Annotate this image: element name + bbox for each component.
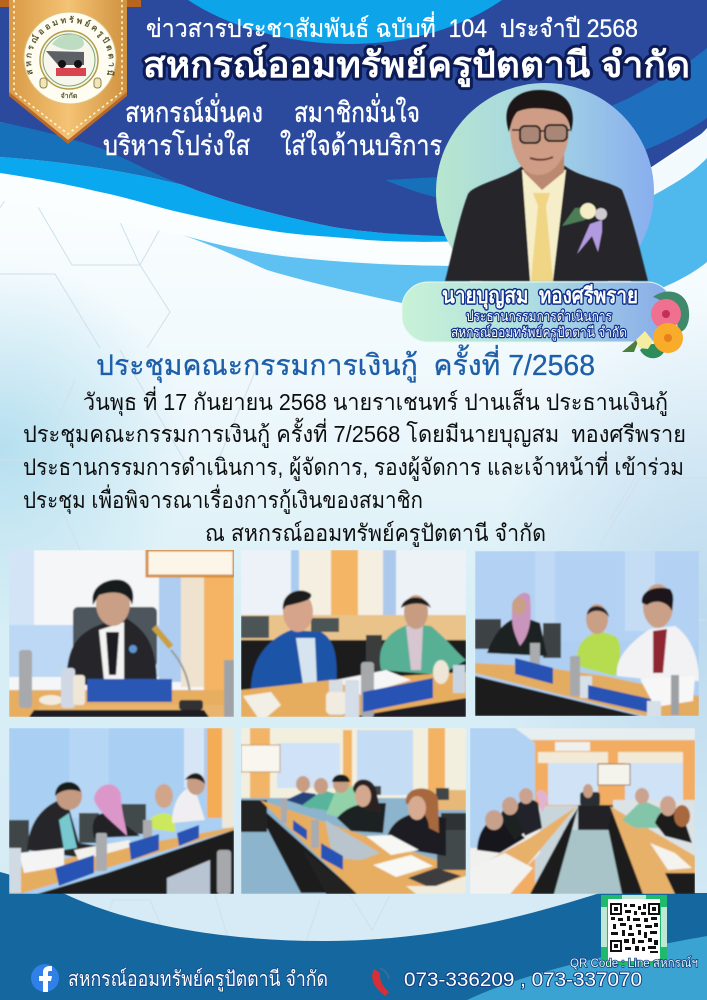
seal ring name [31,23,109,74]
ribbon folds [0,0,141,7]
photo 3: three committee members [475,551,699,716]
white ribbon base [0,170,470,268]
logo ribbon badge [0,0,141,144]
right blue swoosh [606,48,707,150]
stitched border [14,0,122,134]
footer contact bar [31,964,642,996]
code [611,904,659,953]
shirt [522,170,566,281]
photo 2: two committee members at table [241,550,466,717]
section heading: ประชุมคณะกรรมการเงินกู้ ครั้งที่ 7/2568 [96,344,595,383]
header navy band with swooshes [0,0,707,305]
lower left light blue swoosh [182,235,470,305]
right side people [622,800,665,828]
lower right cyan swoosh [467,936,707,1000]
body paragraph [23,386,686,547]
tie [531,193,553,281]
left cyan swoosh [0,157,470,242]
right white swoosh [640,128,707,200]
phone numbers: 073-336209 , 073-337070 [404,970,642,991]
glasses [520,125,567,143]
photo 6: full meeting room view [470,728,695,894]
QR caption: QR Code : Line สหกรณ์ฯ [570,956,698,970]
body paragraph: ประชุมคณะกรรมการเงินกู้ ครั้งที่ 7/2568 โดยมีนายบุญสม ทองศรีพราย [23,418,686,448]
background hexagon pattern [0,178,707,945]
seal [24,12,116,104]
gold ribbon [9,0,127,143]
corsage [562,203,607,254]
organisation name: สหกรณ์ออมทรัพย์ครูปัตตานี จำกัด [451,324,627,341]
suit [445,166,648,281]
facebook page name: สหกรณ์ออมทรัพย์ครูปัตตานี จำกัด [68,967,328,992]
gradient disc [436,83,654,301]
left side people [477,816,525,853]
icon: phone [372,968,389,996]
papers [470,853,533,894]
slogans: บริหารโปร่งใส [103,129,250,161]
navy band [0,0,707,240]
footer wave [0,872,707,1000]
seal: จำกัด [61,92,78,100]
name plate [402,282,673,342]
left blue swoosh [0,122,183,185]
slogans: ใส่ใจด้านบริการ [280,129,442,161]
icon: facebook [31,964,59,992]
icon: tropical flowers [622,292,689,358]
body paragraph: ประชุม เพื่อพิจารณาเรื่องการกู้เงินของสมาชิก [23,484,423,514]
body paragraph: วันพุธ ที่ 17 กันยายน 2568 นายราเชนทร์ ปานเส็น ประธานเงินกู้ [83,386,668,416]
top cyan swoosh [188,0,502,44]
chairman portrait [436,83,654,301]
green frame [601,895,667,965]
hair [506,90,573,132]
slogans: สหกรณ์มั่นคง [125,93,263,128]
photo 4: members writing along table [9,728,234,894]
QR code [601,895,667,965]
slogans [103,93,442,161]
photo 1: chair speaking at microphone [9,550,234,717]
slogans: สมาชิกมั่นใจ [294,93,420,128]
neck and face [522,150,564,190]
organisation title: สหกรณ์ออมทรัพย์ครูปัตตานี จำกัด [143,44,690,88]
body paragraph: ณ สหกรณ์ออมทรัพย์ครูปัตตานี จำกัด [205,520,546,547]
photo 5: members along long table [241,728,466,894]
chairman name: นายบุญสม ทองศรีพราย [442,283,638,310]
newsletter issue line: ข่าวสารประชาสัมพันธ์ ฉบับที่ 104 ประจำปี 2568 [146,11,638,43]
seal: สหกรณ์ออมทรัพย์ครูปัตตานี [26,16,115,76]
right light blue swoosh [630,158,707,296]
chairman role: ประธานกรรมการดำเนินการ [466,308,612,324]
